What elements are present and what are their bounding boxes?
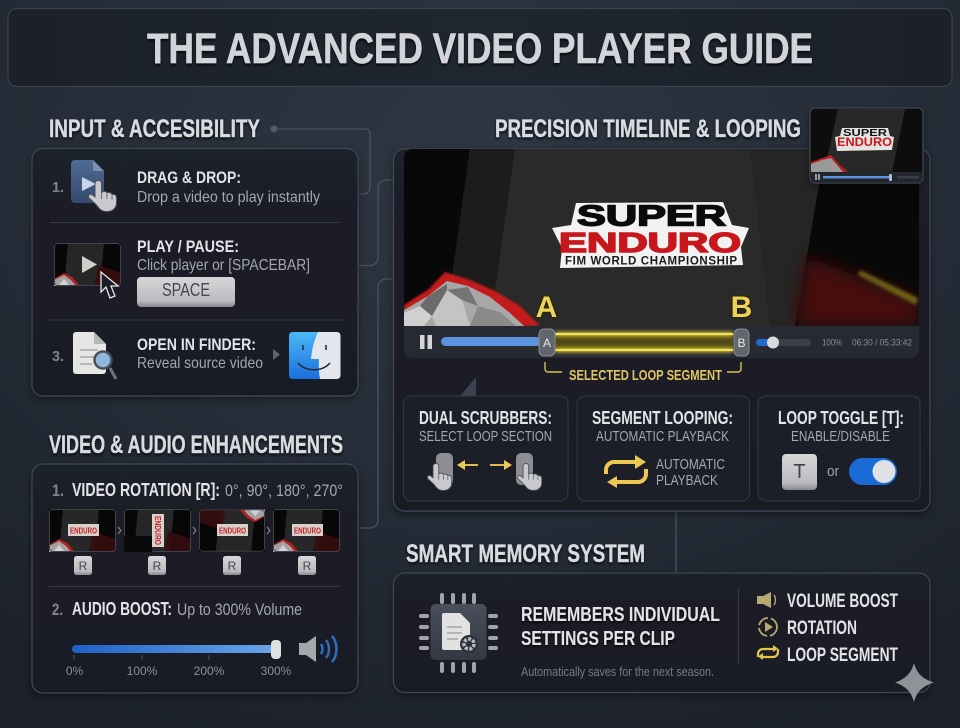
text: drag and drop xyxy=(137,168,320,206)
thumbnail: 90 degrees: ENDURO xyxy=(153,516,162,545)
card: dual scrubbers: DUAL SCRUBBERS: xyxy=(419,408,552,428)
heading: input and accessibility: INPUT & ACCESIBILITY xyxy=(49,115,260,143)
selected loop segment xyxy=(555,334,733,350)
video player xyxy=(404,149,919,358)
time readout: 100% xyxy=(822,338,842,348)
key: T: T xyxy=(793,461,806,483)
title banner: THE ADVANCED VIDEO PLAYER GUIDE xyxy=(147,25,813,73)
text: open in finder xyxy=(137,335,263,372)
card: dual scrubbers: SELECT LOOP SECTION xyxy=(419,428,552,445)
audio slider xyxy=(66,640,292,678)
logo: Super Enduro: FIM WORLD CHAMPIONSHIP xyxy=(565,256,737,268)
R keys xyxy=(74,556,316,575)
key: space: SPACE xyxy=(162,280,210,300)
panel: smart memory system xyxy=(394,573,930,692)
controls bar xyxy=(404,326,919,358)
icon: document with magnifier xyxy=(73,332,116,379)
text: audio boost: Up to 300% Volume xyxy=(177,600,302,619)
panel: input and accessibility xyxy=(32,148,358,396)
list: rotation: ROTATION xyxy=(787,618,857,639)
text: remembers settings: Automatically saves for the next season. xyxy=(521,664,714,679)
logo: Super Enduro xyxy=(552,200,749,268)
time readout xyxy=(822,338,912,348)
heading: smart memory system: SMART MEMORY SYSTEM xyxy=(406,540,645,568)
text: open in finder: OPEN IN FINDER: xyxy=(137,335,256,354)
text: open in finder: Reveal source video xyxy=(137,355,263,372)
text: play and pause: PLAY / PAUSE: xyxy=(137,237,239,256)
icon: loop arrows xyxy=(606,455,646,488)
text: video rotation: VIDEO ROTATION [R]: xyxy=(72,480,220,500)
scrubber handle B xyxy=(734,329,749,356)
icon: speaker xyxy=(299,636,336,662)
icon: play thumbnail with cursor xyxy=(54,243,121,298)
panel: precision timeline and looping xyxy=(394,149,930,511)
R keys: R xyxy=(153,559,162,573)
text: drag and drop: DRAG & DROP: xyxy=(137,168,241,187)
text: remembers settings xyxy=(521,604,720,679)
thumbnail: 180 degrees xyxy=(199,509,265,552)
thumbnail: 0 degrees xyxy=(49,509,116,552)
text: play and pause: Click player or [SPACEBAR] xyxy=(137,257,310,274)
card: segment looping: SEGMENT LOOPING: xyxy=(592,408,733,428)
connector lines xyxy=(270,126,676,572)
mini player thumbnail: SUPER xyxy=(843,128,888,139)
card: segment looping: PLAYBACK xyxy=(656,472,718,489)
heading: precision timeline: PRECISION TIMELINE & LOOPING xyxy=(495,115,801,143)
thumbnail: 180 degrees: ENDURO xyxy=(219,526,246,536)
volume slider xyxy=(756,336,811,348)
card: dual scrubbers xyxy=(404,396,568,501)
text: audio boost: AUDIO BOOST: xyxy=(72,599,172,619)
title banner xyxy=(8,8,952,86)
marker A: A xyxy=(536,291,557,324)
logo: Super Enduro: ENDURO xyxy=(559,227,741,258)
pointer triangle xyxy=(460,377,476,396)
card: segment looping: AUTOMATIC xyxy=(656,456,725,473)
list: volume boost xyxy=(757,591,898,612)
key: space xyxy=(137,277,235,307)
heading: video and audio enhancements: VIDEO & AUDIO ENHANCEMENTS xyxy=(49,431,343,459)
thumbnail: 270 degrees: ENDURO xyxy=(294,526,321,536)
card: segment looping xyxy=(577,396,750,501)
rotation arrows xyxy=(118,527,270,534)
card: loop toggle: LOOP TOGGLE [T]: xyxy=(778,408,904,428)
audio slider: 200% xyxy=(194,664,225,678)
card: loop toggle: ENABLE/DISABLE xyxy=(791,428,890,445)
arrow to finder xyxy=(273,349,280,360)
selected loop segment label xyxy=(545,362,741,384)
icon: sparkle watermark xyxy=(895,663,934,702)
thumbnail: 0 degrees: ENDURO xyxy=(70,526,97,536)
step 3 number: 3. xyxy=(52,348,64,365)
text: audio boost xyxy=(52,599,302,619)
scrubber handle B: B xyxy=(737,336,746,350)
scrubber handle A xyxy=(539,329,555,356)
scrubber handle A: A xyxy=(543,336,551,350)
rock xyxy=(404,272,540,326)
text: audio boost: 2. xyxy=(52,600,63,619)
audio slider: 0% xyxy=(66,664,84,678)
list: loop segment: LOOP SEGMENT xyxy=(787,645,898,666)
audio slider: 100% xyxy=(127,664,158,678)
thumbnail: 270 degrees xyxy=(273,509,340,552)
R keys: R xyxy=(79,559,88,573)
logo: Super Enduro: SUPER xyxy=(577,200,726,232)
played progress bar xyxy=(441,337,541,346)
text: video rotation: 0°, 90°, 180°, 270° xyxy=(225,481,343,500)
text: video rotation xyxy=(52,480,343,500)
pause button xyxy=(420,335,432,349)
R keys: R xyxy=(228,559,237,573)
list: loop segment xyxy=(758,645,898,666)
text: play and pause xyxy=(137,237,310,274)
list: volume boost: VOLUME BOOST xyxy=(787,591,898,612)
toggle switch xyxy=(849,458,897,485)
icon: video file with hand xyxy=(71,160,116,212)
audio slider: 300% xyxy=(261,664,292,678)
text: remembers settings: SETTINGS PER CLIP xyxy=(521,628,675,650)
card: loop toggle xyxy=(758,396,920,501)
key: T xyxy=(782,454,817,490)
panel: video and audio enhancements xyxy=(32,464,358,693)
card: loop toggle: or xyxy=(827,463,839,480)
mini player thumbnail xyxy=(810,108,923,183)
mini player thumbnail: ENDURO xyxy=(837,135,892,149)
step 1 number: 1. xyxy=(52,179,64,196)
icon: finder xyxy=(289,332,341,379)
text: video rotation: 1. xyxy=(52,481,64,500)
icon: memory chip xyxy=(421,595,496,671)
selected loop segment label: SELECTED LOOP SEGMENT xyxy=(569,367,722,384)
time readout: 06:30 / 05:33:42 xyxy=(852,338,912,348)
thumbnail: 90 degrees xyxy=(124,509,191,552)
text: remembers settings: REMEMBERS INDIVIDUAL xyxy=(521,604,720,626)
icon: dual scrubber hands xyxy=(427,453,542,490)
card: segment looping: AUTOMATIC PLAYBACK xyxy=(596,428,729,445)
list: rotation xyxy=(759,618,857,639)
text: drag and drop: Drop a video to play instantly xyxy=(137,189,320,206)
R keys: R xyxy=(303,559,312,573)
marker B: B xyxy=(731,291,752,324)
